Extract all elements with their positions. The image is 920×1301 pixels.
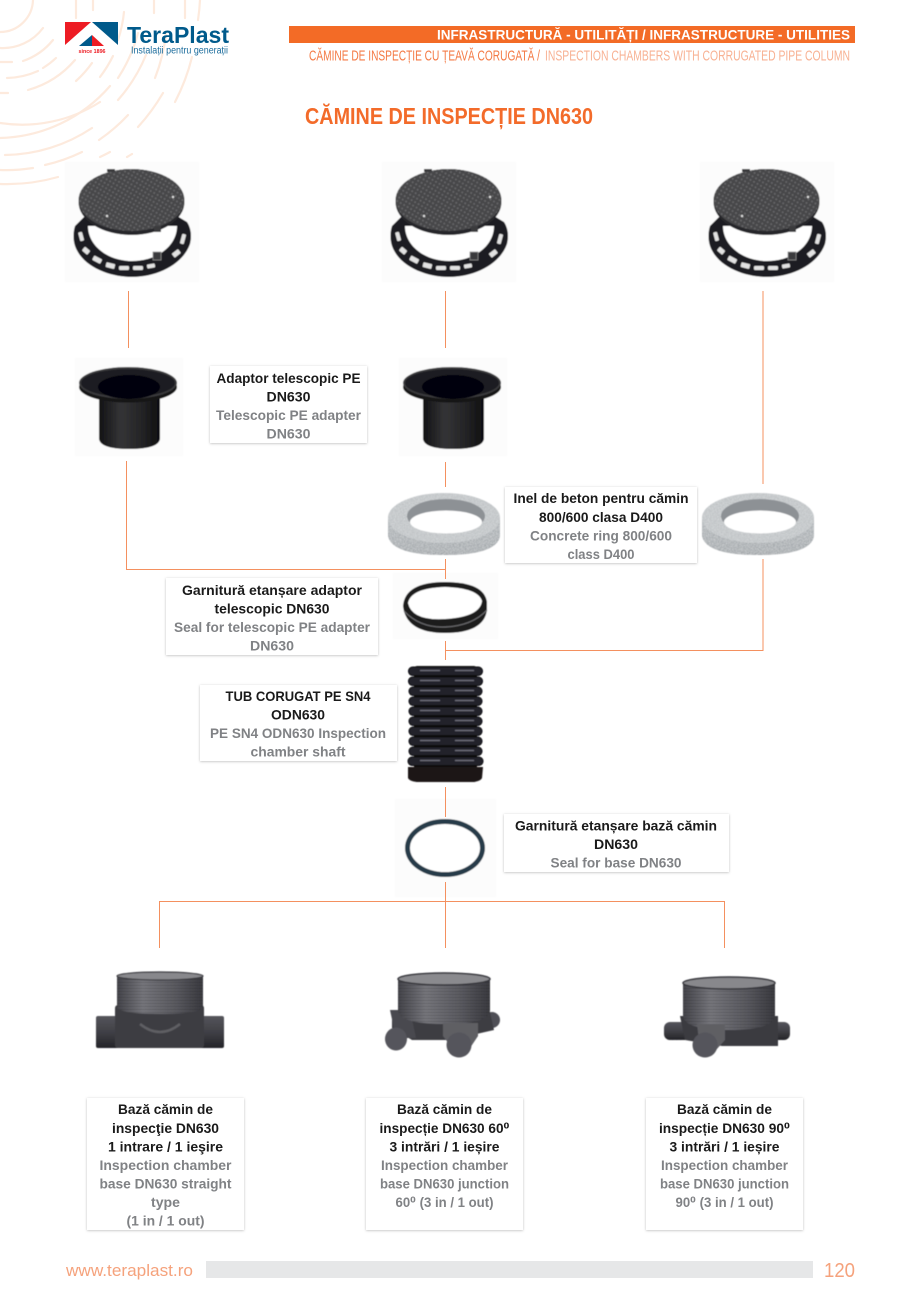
icon: corrugated pipe (408, 666, 483, 782)
label: telescopic adapter: Telescopic PE adapter (216, 407, 362, 423)
label: 90 degree base: base DN630 junction (660, 1176, 789, 1192)
icon: adapter seal (393, 573, 498, 639)
label: adapter seal: telescopic DN630 (214, 600, 330, 616)
label: concrete ring: class D400 (568, 546, 635, 562)
label: 60 degree base: base DN630 junction (380, 1176, 509, 1192)
label: straight base: type (151, 1194, 180, 1210)
label: 90 degree base: 90⁰ (3 in / 1 out) (676, 1194, 774, 1210)
footer bar (206, 1261, 813, 1278)
label: 90 degree base (646, 1098, 803, 1230)
logo mark (65, 22, 118, 55)
logo mark: since 1896 (78, 49, 106, 55)
label: telescopic adapter: DN630 (266, 388, 311, 404)
label: 60 degree base (366, 1098, 523, 1230)
title: CĂMINE DE INSPECȚIE DN630 (305, 102, 593, 129)
header band (289, 26, 855, 43)
background arc pattern (0, 0, 200, 184)
label: corrugated pipe (200, 685, 397, 761)
icon: telescopic adapter left (75, 358, 183, 456)
label: base seal: Seal for base DN630 (550, 854, 682, 870)
header band: INFRASTRUCTURĂ - UTILITĂȚI / INFRASTRUCTURE - UTILITIES (437, 26, 850, 42)
label: base seal (504, 814, 729, 872)
icon: concrete ring center (388, 493, 500, 555)
footer website: www.teraplast.ro (65, 1261, 193, 1280)
label: 60 degree base: Bază cămin de (397, 1101, 492, 1117)
icon: base seal (395, 799, 496, 897)
label: 90 degree base: Bază cămin de (677, 1101, 772, 1117)
connector lines (126, 291, 763, 948)
icon: telescopic adapter center (399, 358, 507, 456)
label: straight base: (1 in / 1 out) (126, 1212, 204, 1228)
label: straight base: inspecţie DN630 (112, 1120, 219, 1136)
label: straight base: base DN630 straight (100, 1176, 232, 1192)
label: telescopic adapter: Adaptor telescopic PE (216, 370, 360, 386)
label: telescopic adapter: DN630 (266, 426, 311, 442)
label: base seal: DN630 (594, 836, 638, 852)
icon: 90 degree base (664, 977, 790, 1058)
label: adapter seal: Seal for telescopic PE adapter (174, 619, 371, 635)
label: corrugated pipe: PE SN4 ODN630 Inspection (210, 725, 386, 741)
label: corrugated pipe: TUB CORUGAT PE SN4 (226, 688, 371, 704)
label: 60 degree base: inspecție DN630 60⁰ (380, 1120, 510, 1136)
label: straight base: Bază cămin de (118, 1101, 213, 1117)
logo (65, 22, 229, 56)
label: straight base (87, 1098, 244, 1230)
label: concrete ring: Concrete ring 800/600 (530, 528, 672, 544)
label: 60 degree base: 3 intrări / 1 ieșire (390, 1138, 500, 1154)
label: 90 degree base: Inspection chamber (661, 1157, 789, 1173)
logo wordmark: TeraPlast (127, 22, 229, 48)
label: 60 degree base: 60⁰ (3 in / 1 out) (396, 1194, 494, 1210)
logo tagline: Instalații pentru generații (131, 46, 228, 56)
icon: manhole cover center (382, 162, 516, 282)
label: 90 degree base: inspecție DN630 90⁰ (659, 1120, 790, 1136)
label: corrugated pipe: chamber shaft (250, 744, 346, 760)
label: straight base: Inspection chamber (100, 1157, 232, 1173)
icon: manhole cover right (700, 162, 834, 282)
label: 60 degree base: Inspection chamber (381, 1157, 509, 1173)
icon: straight base (96, 972, 224, 1048)
label: concrete ring: Inel de beton pentru cămin (514, 490, 688, 506)
icon: manhole cover left (65, 162, 199, 282)
label: telescopic adapter (210, 366, 367, 443)
label: adapter seal: Garnitură etanșare adaptor (182, 582, 363, 598)
label: 90 degree base: 3 intrări / 1 ieșire (670, 1138, 780, 1154)
header subtitle: CĂMINE DE INSPECȚIE CU ȚEAVĂ CORUGATĂ / (309, 48, 541, 64)
label: straight base: 1 intrare / 1 ieşire (108, 1138, 223, 1154)
icon: 60 degree base (385, 973, 500, 1058)
icon: concrete ring right (702, 493, 814, 555)
label: adapter seal (166, 578, 378, 655)
label: corrugated pipe: ODN630 (271, 706, 325, 722)
header subtitle (309, 48, 850, 64)
label: concrete ring: 800/600 clasa D400 (539, 509, 663, 525)
label: concrete ring (505, 487, 697, 563)
page number: 120 (824, 1260, 855, 1282)
label: adapter seal: DN630 (250, 638, 294, 654)
label: base seal: Garnitură etanșare bază cămin (515, 818, 717, 834)
